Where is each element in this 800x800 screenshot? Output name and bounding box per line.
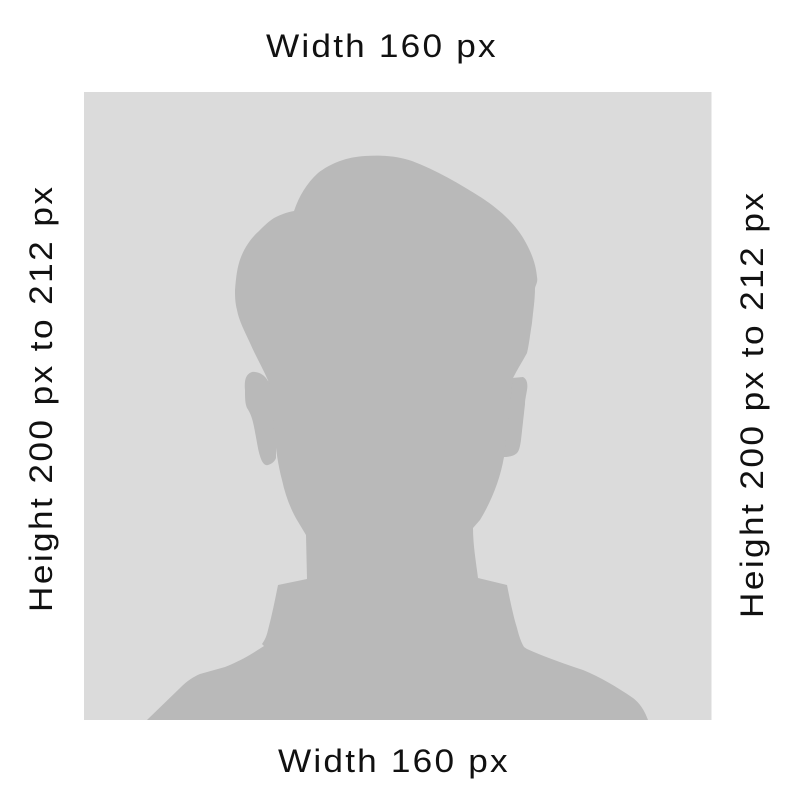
right ear (503, 377, 527, 457)
photo panel (84, 92, 712, 720)
top width label: Width 160 px (266, 29, 498, 65)
left ear (245, 372, 276, 465)
left height label: Height 200 px to 212 px (24, 185, 60, 612)
right height label: Height 200 px to 212 px (735, 191, 771, 618)
bottom width label: Width 160 px (278, 744, 510, 780)
head, neck and shoulders (147, 156, 648, 720)
silhouette (147, 156, 648, 720)
